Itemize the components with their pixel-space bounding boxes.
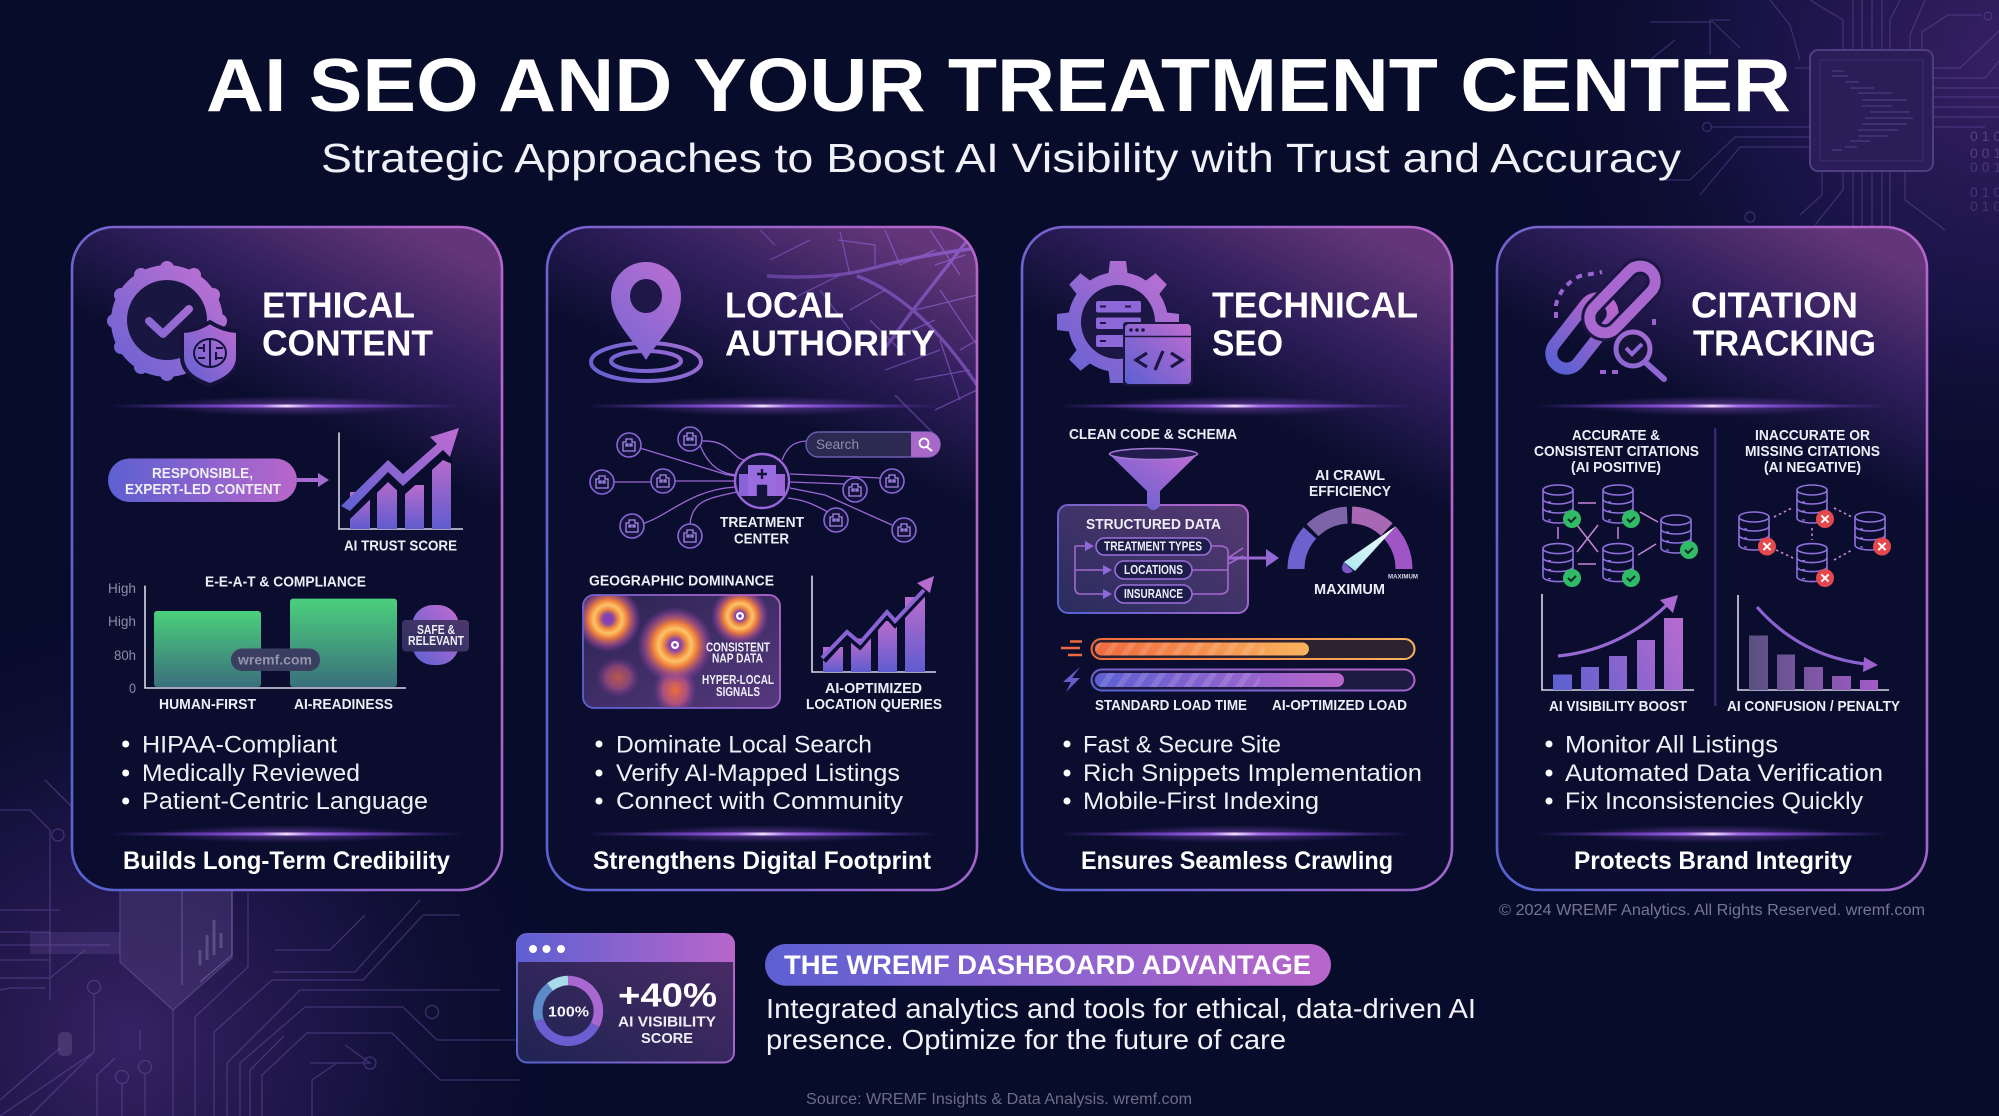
badge: safe and relevant: RELEVANT bbox=[408, 634, 464, 648]
chart: E-E-A-T bars: HUMAN-FIRST bbox=[159, 696, 256, 713]
bullet list bbox=[122, 732, 428, 815]
divider bbox=[1058, 825, 1411, 843]
chart: location queries bbox=[812, 576, 936, 672]
icon: chain link and magnifier bbox=[1545, 260, 1664, 379]
panel: structured data: INSURANCE bbox=[1124, 587, 1183, 601]
background: chip and circuit traces, top right bbox=[1650, 0, 1999, 230]
panel: technical seo bbox=[1022, 227, 1452, 890]
chart: E-E-A-T bars: 0 bbox=[129, 680, 136, 696]
network links bbox=[614, 441, 892, 525]
heading bbox=[1212, 284, 1418, 364]
chart: AI confusion penalty: AI CONFUSION / PENALTY bbox=[1727, 698, 1900, 715]
divider bbox=[1536, 825, 1889, 843]
chart label: AI-OPTIMIZED bbox=[825, 680, 922, 697]
column divider bbox=[1714, 428, 1716, 706]
heading bbox=[1691, 284, 1876, 364]
arrow: to gauge bbox=[1228, 548, 1279, 567]
background: processor chip bbox=[1810, 50, 1933, 171]
search box bbox=[806, 432, 940, 457]
chart: AI confusion penalty bbox=[1727, 595, 1900, 715]
panel: citation tracking bbox=[1497, 227, 1927, 890]
pill: responsible content bbox=[108, 458, 297, 502]
dashboard card: AI VISIBILITY bbox=[618, 1014, 716, 1031]
badge: safe and relevant bbox=[402, 605, 469, 665]
pill: responsible content: RESPONSIBLE, bbox=[152, 465, 253, 482]
watermark bbox=[231, 648, 320, 671]
dashboard card: SCORE bbox=[641, 1030, 693, 1047]
bullet list: Connect with Community bbox=[616, 788, 903, 815]
bullet list: Medically Reviewed bbox=[142, 760, 360, 787]
icon: lightning bbox=[1063, 667, 1080, 692]
network nodes bbox=[590, 427, 916, 548]
chart label: AI TRUST SCORE bbox=[344, 538, 457, 554]
takeaway: Protects Brand Integrity bbox=[1574, 847, 1852, 875]
dashboard card bbox=[517, 934, 734, 1062]
icon: location pin bbox=[591, 262, 701, 381]
heading: CONTENT bbox=[262, 322, 433, 364]
heading: LOCAL bbox=[725, 284, 844, 326]
bar: standard load time bbox=[1092, 639, 1414, 659]
diagram: negative database network bbox=[1739, 485, 1891, 587]
chart: E-E-A-T bars bbox=[108, 580, 406, 713]
search box: Search bbox=[816, 436, 859, 452]
bullet list: HIPAA-Compliant bbox=[142, 732, 337, 758]
heading: positive citations bbox=[1534, 427, 1699, 476]
bullet list: Automated Data Verification bbox=[1565, 760, 1883, 787]
advantage pill heading: THE WREMF DASHBOARD ADVANTAGE bbox=[784, 950, 1311, 980]
chart: E-E-A-T bars: High bbox=[108, 613, 136, 629]
takeaway: Ensures Seamless Crawling bbox=[1081, 847, 1393, 875]
background: binary digits bbox=[1970, 128, 1999, 214]
chart: E-E-A-T bars: 80h bbox=[114, 647, 136, 663]
heading: negative citations: INACCURATE OR bbox=[1755, 427, 1870, 444]
bullet list: Dominate Local Search bbox=[616, 732, 872, 758]
bullet list bbox=[596, 732, 903, 815]
bullet list bbox=[1546, 732, 1883, 815]
advantage description bbox=[766, 993, 1476, 1055]
advantage description: Integrated analytics and tools for ethical, data-driven AI bbox=[766, 993, 1476, 1024]
background: circuit traces, bottom left bbox=[0, 780, 520, 1116]
advantage pill heading bbox=[765, 944, 1331, 986]
heading: positive citations: (AI POSITIVE) bbox=[1571, 459, 1661, 476]
diagram: positive database network bbox=[1543, 485, 1698, 587]
label: crawl efficiency: AI CRAWL bbox=[1315, 467, 1385, 484]
bullet list: Verify AI-Mapped Listings bbox=[616, 760, 900, 787]
divider bbox=[110, 825, 463, 843]
label: maximum: MAXIMUM bbox=[1388, 575, 1418, 581]
divider bbox=[586, 825, 939, 843]
chart: AI visibility boost: AI VISIBILITY BOOST bbox=[1549, 698, 1687, 715]
panel: structured data: LOCATIONS bbox=[1124, 563, 1183, 577]
icon: funnel bbox=[1109, 448, 1198, 510]
divider bbox=[1058, 396, 1411, 416]
panel frame bbox=[1497, 227, 1927, 890]
bullet list: Fix Inconsistencies Quickly bbox=[1565, 788, 1863, 815]
icon: badge with check and shield brain bbox=[107, 261, 238, 385]
takeaway: Strengthens Digital Footprint bbox=[593, 847, 932, 875]
panel: structured data bbox=[1058, 505, 1248, 613]
icon: gear with server and code window bbox=[1057, 261, 1193, 386]
pill: responsible content: EXPERT-LED CONTENT bbox=[125, 481, 281, 498]
label: crawl efficiency bbox=[1309, 467, 1391, 500]
bullet list: Rich Snippets Implementation bbox=[1083, 760, 1422, 787]
bar: ai-optimized load bbox=[1092, 670, 1414, 690]
chart heading: E-E-A-T: E-E-A-T & COMPLIANCE bbox=[205, 574, 366, 590]
chart: AI visibility boost bbox=[1542, 594, 1694, 715]
heading: negative citations: MISSING CITATIONS bbox=[1745, 443, 1880, 460]
advantage description: presence. Optimize for the future of care bbox=[766, 1024, 1286, 1055]
badge: safe and relevant: SAFE & bbox=[417, 623, 455, 637]
chart label bbox=[806, 680, 942, 713]
heading: geographic dominance: GEOGRAPHIC DOMINANCE bbox=[589, 573, 774, 590]
heading: negative citations bbox=[1745, 427, 1880, 476]
chart: AI trust score bbox=[339, 428, 463, 529]
label: maximum: MAXIMUM bbox=[1314, 581, 1385, 598]
bar labels bbox=[1095, 697, 1407, 714]
label: crawl efficiency: EFFICIENCY bbox=[1309, 483, 1391, 500]
heading: TRACKING bbox=[1693, 322, 1876, 364]
heading: AUTHORITY bbox=[725, 322, 935, 364]
heading: positive citations: ACCURATE & bbox=[1572, 427, 1660, 444]
bullet list: Mobile-First Indexing bbox=[1083, 788, 1319, 815]
subtitle: Strategic Approaches to Boost AI Visibility with Trust and Accuracy bbox=[321, 135, 1682, 181]
takeaway: Builds Long-Term Credibility bbox=[123, 847, 450, 875]
bar labels: AI-OPTIMIZED LOAD bbox=[1272, 697, 1407, 714]
map roads bbox=[760, 230, 977, 435]
panel: ethical content bbox=[72, 227, 502, 890]
watermark: wremf.com bbox=[237, 652, 312, 668]
source note: Source: WREMF Insights & Data Analysis. wremf.com bbox=[806, 1091, 1192, 1108]
heading: ETHICAL bbox=[262, 284, 415, 326]
divider bbox=[110, 396, 463, 416]
bullet list bbox=[1064, 732, 1422, 815]
panel frame bbox=[547, 227, 977, 890]
divider bbox=[1536, 396, 1889, 416]
bullet list: Patient-Centric Language bbox=[142, 788, 428, 815]
heading: positive citations: CONSISTENT CITATIONS bbox=[1534, 443, 1699, 460]
gauge bbox=[1296, 515, 1404, 573]
heading bbox=[725, 284, 935, 364]
heat map bbox=[582, 594, 781, 709]
heat map: SIGNALS bbox=[716, 685, 760, 699]
icon: treatment center hub bbox=[735, 454, 789, 508]
copyright: © 2024 WREMF Analytics. All Rights Reserved. wremf.com bbox=[1499, 902, 1925, 919]
chart: E-E-A-T bars: AI-READINESS bbox=[294, 696, 393, 713]
heat map: NAP DATA bbox=[712, 652, 763, 666]
heading bbox=[262, 284, 433, 364]
heading: negative citations: (AI NEGATIVE) bbox=[1764, 459, 1861, 476]
heading: TECHNICAL bbox=[1212, 284, 1418, 326]
chart label: LOCATION QUERIES bbox=[806, 696, 942, 713]
label: treatment center: CENTER bbox=[734, 530, 789, 548]
heading: SEO bbox=[1212, 322, 1283, 364]
heading: CITATION bbox=[1691, 284, 1858, 326]
dashboard card: 100% bbox=[548, 1004, 589, 1021]
icon: speed lines bbox=[1061, 642, 1082, 655]
heat map: HYPER-LOCAL bbox=[702, 673, 774, 687]
panel: structured data: TREATMENT TYPES bbox=[1104, 540, 1202, 554]
heat map: CONSISTENT bbox=[706, 640, 770, 654]
panel frame bbox=[1022, 227, 1452, 890]
title: AI SEO AND YOUR TREATMENT CENTER bbox=[206, 43, 1791, 127]
arrow bbox=[297, 473, 329, 487]
label: maximum bbox=[1314, 575, 1418, 598]
bullet list: Fast & Secure Site bbox=[1083, 732, 1281, 758]
panel: structured data: STRUCTURED DATA bbox=[1086, 516, 1221, 533]
chart: E-E-A-T bars: High bbox=[108, 580, 136, 596]
panel border bbox=[547, 227, 977, 890]
bullet list: Monitor All Listings bbox=[1565, 732, 1778, 758]
label: clean code: CLEAN CODE & SCHEMA bbox=[1069, 426, 1237, 443]
divider bbox=[586, 396, 939, 416]
background: pointed data block bbox=[30, 890, 232, 1056]
bar labels: STANDARD LOAD TIME bbox=[1095, 697, 1247, 714]
panel frame bbox=[72, 227, 502, 890]
label: treatment center bbox=[720, 514, 804, 548]
dashboard card: +40% bbox=[618, 977, 717, 1014]
panel: local authority bbox=[547, 227, 977, 890]
label: treatment center: TREATMENT bbox=[720, 514, 804, 531]
